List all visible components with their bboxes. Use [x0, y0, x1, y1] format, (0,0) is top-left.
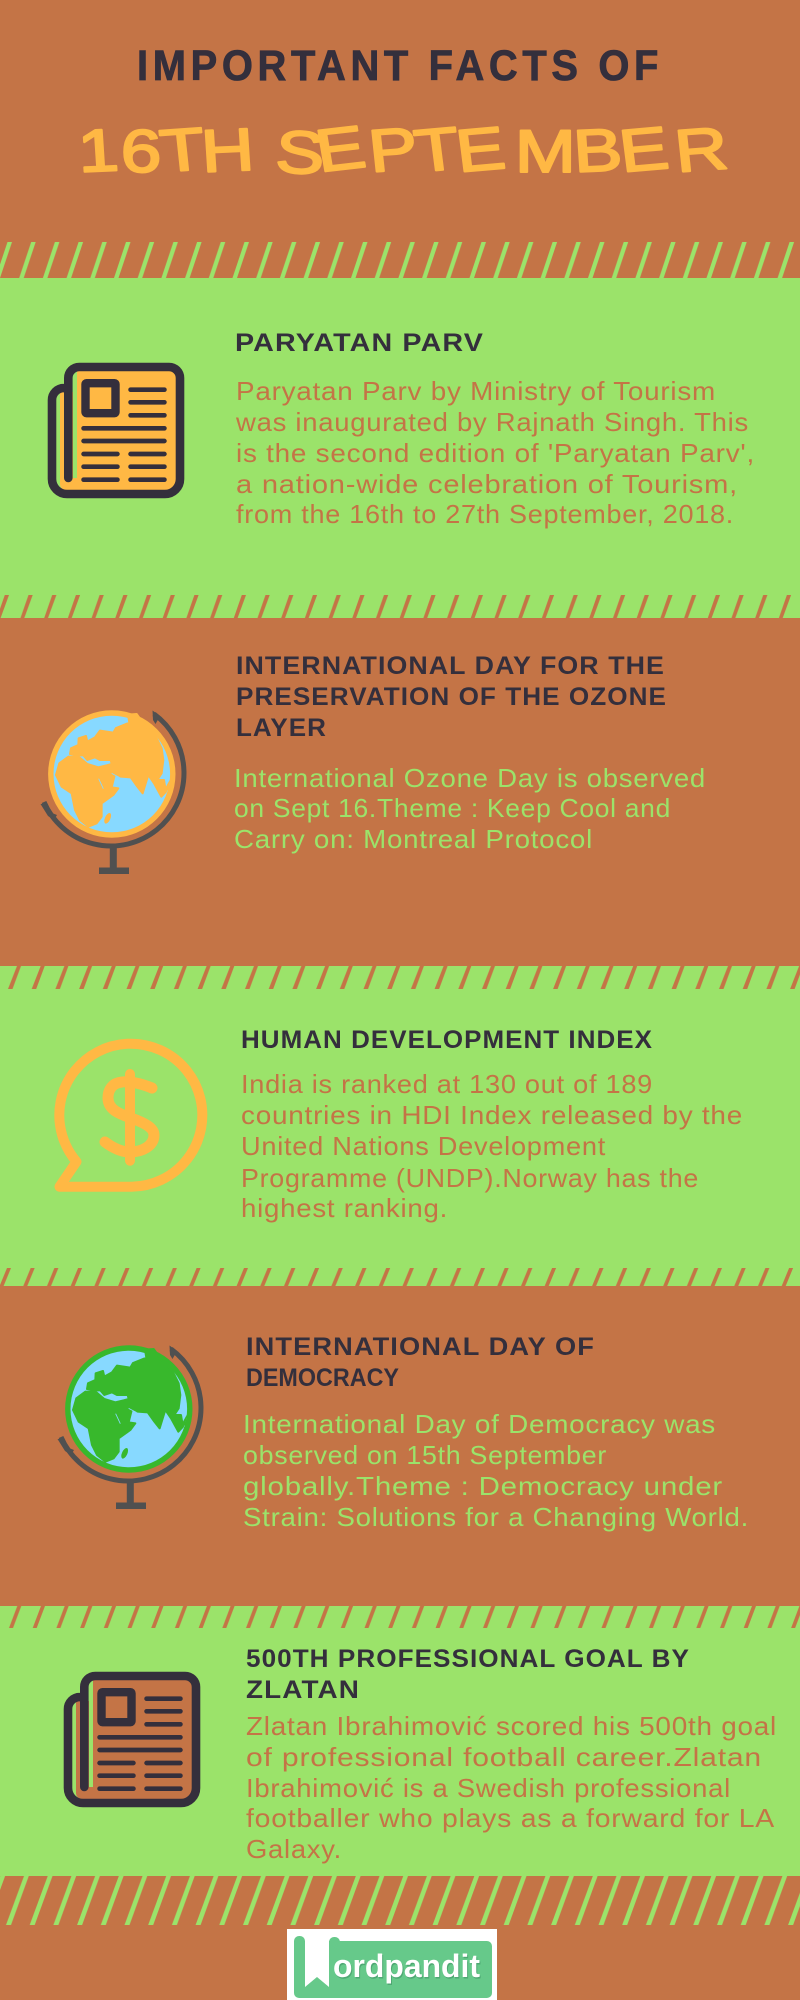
icon: newspaper: [52, 367, 180, 494]
icon: newspaper brown: [68, 1676, 196, 1803]
body text: was inaugurated by Rajnath Singh. This: [235, 407, 749, 437]
heading: LAYER: [236, 714, 327, 742]
body text: a nation-wide celebration of Tourism,: [236, 469, 738, 499]
body text: from the 16th to 27th September, 2018.: [236, 499, 734, 529]
body text: Carry on: Montreal Protocol: [234, 824, 593, 854]
body text: of professional football career.Zlatan: [246, 1742, 762, 1772]
body text: highest ranking.: [241, 1193, 448, 1223]
panel: Human Development Index: [0, 966, 800, 1286]
heading: [236, 652, 667, 742]
body text: globally.Theme : Democracy under: [243, 1471, 723, 1501]
body text: Ibrahimović is a Swedish professional: [246, 1773, 731, 1803]
panel: Paryatan Parv: [0, 278, 800, 618]
logo: wordpandit: ordpandit: [333, 1948, 480, 1984]
body text: Programme (UNDP).Norway has the: [241, 1163, 699, 1193]
body text: India is ranked at 130 out of 189: [241, 1069, 653, 1099]
logo: wordpandit: ordpandit: [334, 1950, 481, 1986]
title: IMPORTANT FACTS OF: [137, 42, 663, 90]
body text: [234, 763, 706, 854]
body text: Paryatan Parv by Ministry of Tourism: [236, 376, 716, 406]
heading: [246, 1645, 690, 1704]
body text: International Day of Democracy was: [243, 1409, 716, 1439]
panel: 500th professional goal by Zlatan: [0, 1606, 800, 1876]
icon: green globe: [58, 1345, 201, 1509]
body text: is the second edition of 'Paryatan Parv',: [236, 438, 755, 468]
body text: countries in HDI Index released by the: [241, 1100, 743, 1130]
subtitle date: 16TH SEPTEMBER: [76, 113, 731, 188]
icon: dollar speech bubble: [59, 1044, 202, 1187]
body text: Galaxy.: [246, 1834, 342, 1864]
body text: [235, 376, 755, 529]
heading: DEMOCRACY: [246, 1364, 399, 1392]
body text: Strain: Solutions for a Changing World.: [243, 1502, 749, 1532]
heading: HUMAN DEVELOPMENT INDEX: [241, 1026, 653, 1054]
heading: [246, 1333, 595, 1392]
logo: wordpandit: [287, 1929, 497, 2000]
heading: INTERNATIONAL DAY OF: [246, 1333, 595, 1361]
panel: International Day of Democracy: [58, 1333, 749, 1532]
body text: on Sept 16.Theme : Keep Cool and: [234, 793, 671, 823]
panel: Ozone layer day: [40, 652, 706, 874]
header panel: [76, 42, 731, 188]
body text: [241, 1069, 743, 1223]
heading: 500TH PROFESSIONAL GOAL BY: [246, 1645, 690, 1673]
body text: footballer who plays as a forward for LA: [246, 1803, 775, 1833]
heading: ZLATAN: [246, 1676, 360, 1704]
heading: INTERNATIONAL DAY FOR THE: [236, 652, 665, 680]
body text: observed on 15th September: [243, 1440, 607, 1470]
body text: [246, 1711, 777, 1864]
body text: [243, 1409, 749, 1532]
body text: International Ozone Day is observed: [234, 763, 706, 793]
body text: United Nations Development: [241, 1131, 606, 1161]
body text: Zlatan Ibrahimović scored his 500th goal: [246, 1711, 777, 1741]
heading: PRESERVATION OF THE OZONE: [236, 683, 667, 711]
icon: yellow globe: [40, 710, 184, 874]
heading: PARYATAN PARV: [235, 329, 484, 357]
